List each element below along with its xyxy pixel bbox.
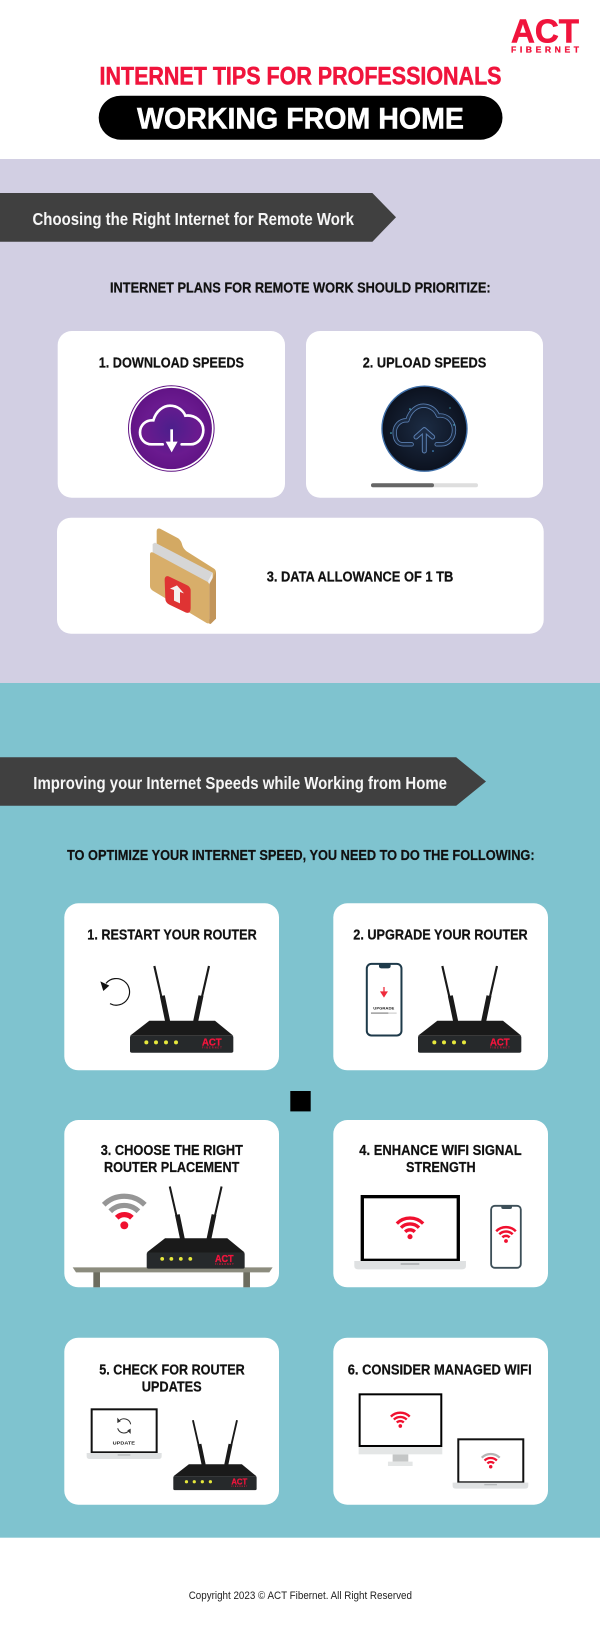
icon: small laptop	[453, 1439, 528, 1489]
subtitle pill: WORKING FROM HOME	[137, 103, 464, 136]
logo: ACT Fibernet: ACT	[511, 12, 579, 49]
card: upgrade router: 2. UPGRADE YOUR ROUTER	[353, 926, 528, 943]
card: router updates: 5. CHECK FOR ROUTER	[99, 1361, 245, 1378]
icon: cloud download	[128, 386, 214, 471]
card: download speeds: 1. DOWNLOAD SPEEDS	[99, 355, 244, 372]
icon: laptop update: UPDATE	[113, 1440, 136, 1446]
section banner 2	[0, 757, 486, 806]
progress bar	[371, 483, 478, 487]
icon: wifi on small laptop	[482, 1454, 500, 1468]
card: managed wifi	[333, 1338, 548, 1505]
card: upload speeds: 2. UPLOAD SPEEDS	[363, 355, 486, 372]
icon: table	[73, 1267, 273, 1287]
card: wifi strength	[333, 1120, 548, 1287]
card: router placement: ROUTER PLACEMENT	[104, 1159, 240, 1176]
icon: laptop	[354, 1197, 466, 1269]
icon: router	[418, 966, 521, 1053]
icon: router: ACT	[215, 1254, 234, 1265]
card: managed wifi: 6. CONSIDER MANAGED WIFI	[348, 1361, 532, 1378]
card: download speeds	[58, 331, 285, 498]
card: router placement: 3. CHOOSE THE RIGHT	[101, 1142, 244, 1159]
icon: router: FIBERNET	[490, 1048, 510, 1050]
card: wifi strength: 4. ENHANCE WIFI SIGNAL	[359, 1142, 522, 1159]
subtitle pill	[99, 96, 502, 140]
panel: improving internet speeds	[0, 683, 600, 1538]
icon: wifi on phone	[496, 1227, 516, 1243]
icon: wifi on laptop	[397, 1218, 423, 1239]
icon: router	[130, 966, 233, 1053]
icon: cloud upload	[382, 386, 467, 471]
title: INTERNET TIPS FOR PROFESSIONALS	[100, 63, 502, 90]
icon: router	[173, 1420, 257, 1490]
card: upgrade router	[333, 903, 548, 1070]
section banner 1	[0, 193, 396, 242]
icon: router: ACT	[202, 1038, 222, 1049]
footer copyright: Copyright 2023 © ACT Fibernet. All Right Reserved	[189, 1590, 412, 1602]
card: restart router: 1. RESTART YOUR ROUTER	[87, 926, 257, 943]
icon: router: FIBERNET	[231, 1486, 248, 1488]
section banner 1: Choosing the Right Internet for Remote Work	[32, 209, 354, 229]
icon: phone upgrade	[367, 964, 401, 1035]
logo: ACT Fibernet: FIBERNET	[511, 45, 580, 55]
panel: choosing the right internet	[0, 159, 600, 683]
icon: phone	[491, 1206, 521, 1268]
card: router placement	[64, 1120, 279, 1287]
icon: phone upgrade: UPGRADE	[373, 1006, 395, 1011]
icon: laptop update	[87, 1409, 162, 1459]
icon: wifi on monitor	[391, 1413, 410, 1428]
icon: router	[147, 1186, 245, 1269]
icon: router: ACT	[490, 1038, 510, 1049]
icon: wifi signal	[104, 1196, 145, 1229]
card: restart router	[64, 903, 279, 1070]
card: router updates: UPDATES	[142, 1378, 202, 1395]
section banner 2: Improving your Internet Speeds while Working from Home	[33, 773, 447, 793]
card: data allowance	[57, 518, 544, 634]
card: wifi strength: STRENGTH	[406, 1159, 476, 1176]
card: data allowance: 3. DATA ALLOWANCE OF 1 TB	[267, 569, 453, 586]
black square marker	[290, 1091, 311, 1111]
icon: folder	[150, 529, 216, 624]
icon: desktop monitor	[359, 1394, 442, 1466]
card: router updates	[64, 1338, 279, 1505]
section intro text: INTERNET PLANS FOR REMOTE WORK SHOULD PRIORITIZE:	[110, 280, 491, 296]
icon: restart arrow	[100, 979, 130, 1005]
card: upload speeds	[306, 331, 543, 498]
icon: router: ACT	[231, 1476, 247, 1486]
icon: router: FIBERNET	[215, 1264, 234, 1266]
icon: router: FIBERNET	[202, 1048, 222, 1050]
